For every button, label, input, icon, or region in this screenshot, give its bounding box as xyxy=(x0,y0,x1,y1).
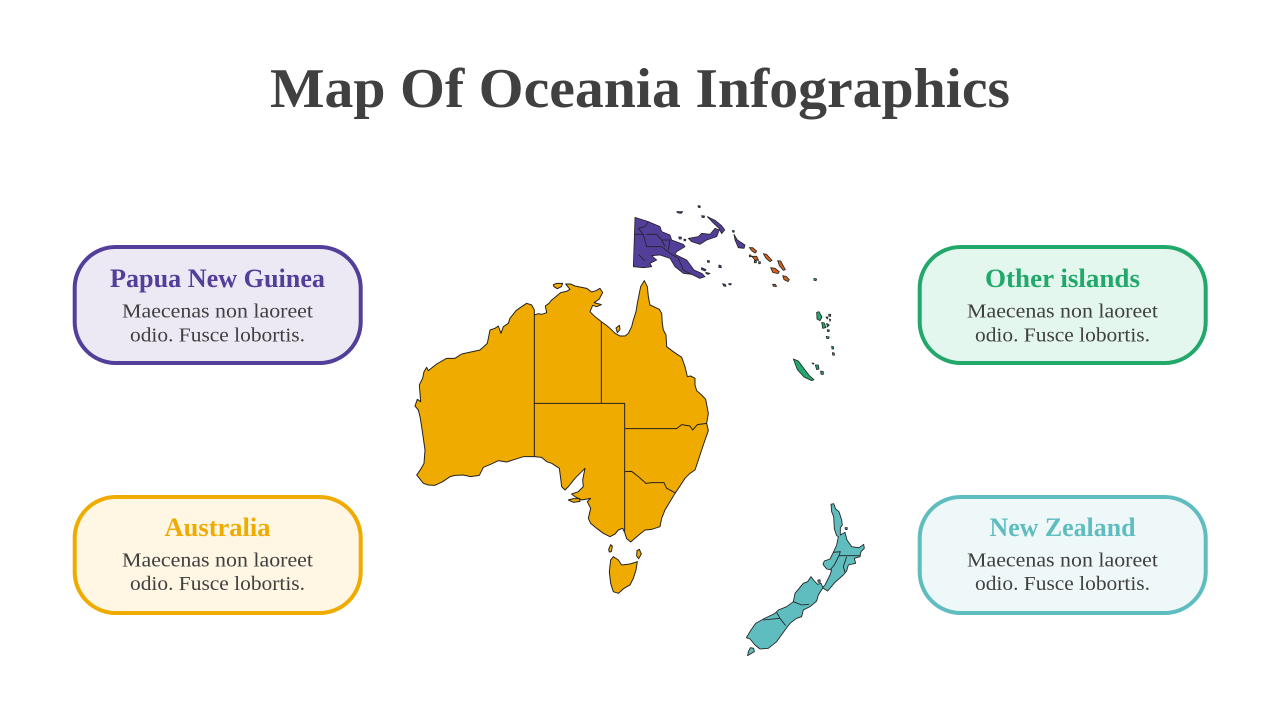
body text: Papua New Guinea: odio. Fusce lobortis. xyxy=(130,324,305,346)
panel: Other islands xyxy=(920,247,1206,363)
South Island regional lines xyxy=(763,602,809,626)
body text: Australia: odio. Fusce lobortis. xyxy=(130,573,305,595)
body text: New Zealand: odio. Fusce lobortis. xyxy=(975,573,1150,595)
map: Solomon Islands xyxy=(749,248,789,286)
New Ireland xyxy=(707,217,725,234)
mainland Australia xyxy=(415,281,708,542)
Melville Island xyxy=(553,283,563,289)
heading: Other islands: Other islands xyxy=(985,264,1140,293)
panel: New Zealand xyxy=(920,497,1206,613)
body text: Other islands: Maecenas non laoreet xyxy=(967,300,1158,322)
New Caledonia xyxy=(793,359,814,381)
Loyalty Islands xyxy=(812,363,823,374)
map: Vanuatu and New Caledonia xyxy=(793,278,834,381)
map: New Zealand xyxy=(746,504,864,656)
panel: Australia xyxy=(75,497,361,613)
body text: Other islands: odio. Fusce lobortis. xyxy=(975,324,1150,346)
North Island regional lines xyxy=(830,552,860,572)
Flinders Island xyxy=(637,549,641,559)
heading: Papua New Guinea: Papua New Guinea xyxy=(110,264,325,293)
King Island xyxy=(609,545,612,552)
map: Papua New Guinea xyxy=(633,206,834,381)
Stewart Island xyxy=(748,648,754,656)
body text: Papua New Guinea: Maecenas non laoreet xyxy=(122,300,313,322)
title: Map Of Oceania Infographics xyxy=(270,58,1010,120)
South Island xyxy=(746,577,823,649)
North Island xyxy=(822,504,864,591)
PNG mainland xyxy=(633,217,705,278)
small islands xyxy=(818,528,847,582)
body text: New Zealand: Maecenas non laoreet xyxy=(967,550,1158,572)
state borders xyxy=(534,315,707,532)
small islands xyxy=(677,206,734,286)
Solomon island chain xyxy=(749,248,789,286)
Bougainville xyxy=(734,234,745,248)
body text: Australia: Maecenas non laoreet xyxy=(122,550,313,572)
heading: Australia: Australia xyxy=(164,513,270,542)
Kangaroo Island xyxy=(568,499,580,502)
PNG district lines xyxy=(635,222,692,274)
Groote Eylandt xyxy=(616,325,620,333)
map: Australia xyxy=(415,281,708,593)
Tasmania xyxy=(609,557,637,593)
New Britain xyxy=(688,228,719,244)
panel: Papua New Guinea xyxy=(75,247,361,363)
Vanuatu islands xyxy=(814,278,834,355)
heading: New Zealand: New Zealand xyxy=(990,513,1136,542)
